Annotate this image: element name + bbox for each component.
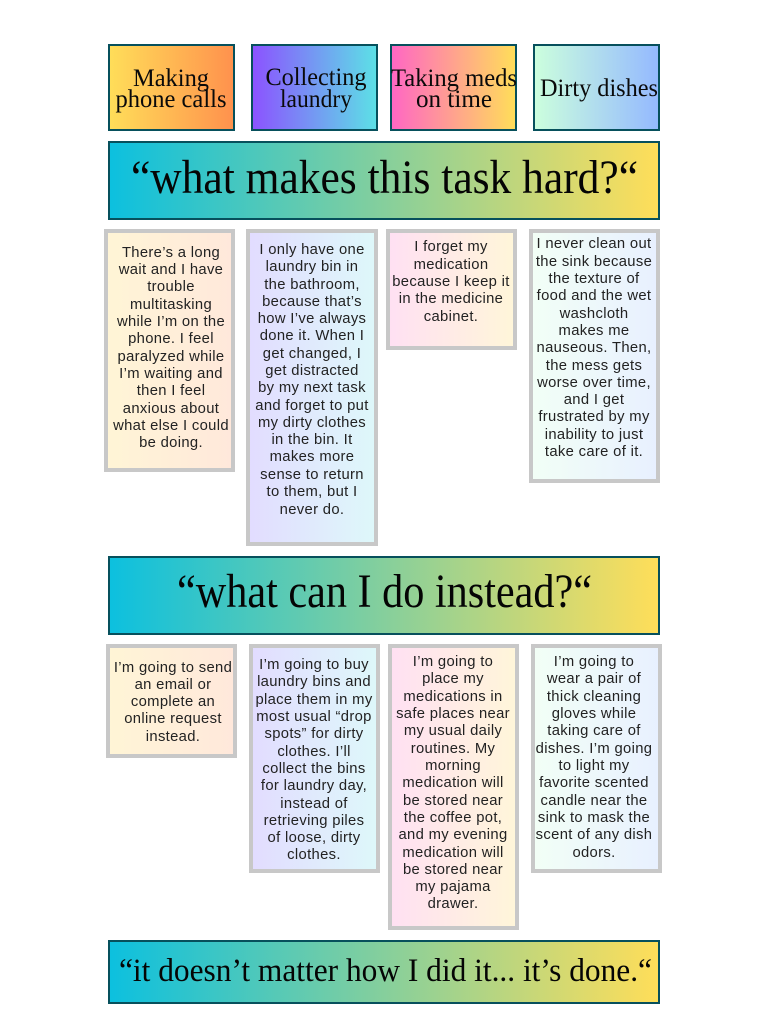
card: dishes difficulty: inability to just: [545, 427, 643, 443]
task label: making phone calls: [109, 45, 234, 130]
heading banner: what makes this task hard: “what makes this task hard?“: [131, 151, 638, 204]
card: laundry alternative: of loose, dirty: [268, 830, 361, 846]
card: laundry alternative: clothes. I’ll: [277, 744, 351, 760]
card: laundry difficulty: makes more: [270, 449, 354, 465]
card: phone calls alternative: complete an: [131, 694, 215, 710]
card: phone calls alternative: online request: [124, 711, 222, 727]
card: dishes alternative: to light my: [558, 758, 630, 774]
card: phone calls difficulty: while I’m on the: [116, 314, 225, 330]
card: laundry difficulty: laundry bin in: [266, 259, 358, 275]
card: phone calls difficulty: anxious about: [123, 401, 219, 417]
card: medication alternative: drawer.: [428, 896, 478, 912]
card: laundry alternative: place them in my: [255, 692, 373, 708]
card: laundry difficulty: get changed, I: [263, 346, 361, 362]
card: laundry alternative: laundry bins and: [257, 674, 371, 690]
card: medication alternative: medication will: [402, 775, 504, 791]
card: dishes alternative: candle near the: [541, 793, 647, 809]
card: medication alternative: be stored near: [403, 793, 503, 809]
card: phone calls difficulty: paralyzed while: [118, 349, 224, 365]
card: laundry alternative: retrieving piles: [264, 813, 364, 829]
card: phone calls difficulty: I’m waiting and: [119, 366, 223, 382]
card: dishes difficulty: I never clean out: [536, 236, 652, 252]
card: medication difficulty: I forget my: [414, 239, 488, 255]
card: laundry difficulty: and forget to put: [255, 398, 369, 414]
card: medication difficulty: medication: [414, 257, 488, 273]
card: laundry difficulty: in the bin. It: [271, 432, 353, 448]
card: medication difficulty: because I keep it: [392, 274, 510, 290]
card: phone calls difficulty: then I feel: [137, 383, 205, 399]
task label: making phone calls: phone calls: [116, 86, 226, 113]
task label: dirty dishes: Dirty dishes: [540, 75, 658, 102]
card: medication difficulty: in the medicine: [399, 291, 503, 307]
card: laundry difficulty: done it. When I: [260, 328, 364, 344]
card: phone calls alternative: instead.: [146, 729, 200, 745]
card: dishes difficulty: worse over time,: [536, 375, 651, 391]
card: dishes difficulty: and I get: [564, 392, 624, 408]
card: laundry difficulty: to them, but I: [267, 484, 357, 500]
card: dishes difficulty: the texture of: [548, 271, 640, 287]
card: laundry difficulty: because that’s: [262, 294, 362, 310]
card: phone calls difficulty: wait and I have: [118, 262, 223, 278]
closing banner: it doesn't matter how I did it: [109, 941, 659, 1003]
card: laundry difficulty: sense to return: [260, 467, 364, 483]
card: laundry alternative: [251, 646, 378, 871]
card: laundry alternative: I’m going to buy: [259, 657, 369, 673]
card: laundry difficulty: never do.: [280, 502, 344, 518]
card: dishes difficulty: the mess gets: [546, 358, 642, 374]
card: dishes alternative: sink to mask the: [538, 810, 650, 826]
card: medication alternative: [390, 646, 517, 928]
card: phone calls difficulty: [106, 231, 233, 470]
heading banner: what can I do instead: “what can I do instead?“: [177, 565, 592, 618]
card: laundry alternative: instead of: [280, 796, 348, 812]
card: dishes alternative: favorite scented: [539, 775, 649, 791]
task label: taking meds on time: [391, 45, 517, 130]
card: medication alternative: safe places near: [396, 706, 510, 722]
card: dishes alternative: wear a pair of: [546, 671, 642, 687]
card: dishes alternative: taking care of: [547, 723, 641, 739]
card: dishes difficulty: frustrated by my: [538, 409, 650, 425]
task label: making phone calls: Making: [133, 65, 209, 92]
card: laundry alternative: spots” for dirty: [264, 726, 364, 742]
task label: collecting laundry: [252, 45, 377, 130]
card: laundry difficulty: how I’ve always: [258, 311, 366, 327]
closing banner: it doesn't matter how I did it: “it doesn’t matter how I did it... it’s done.“: [119, 953, 652, 989]
card: medication alternative: the coffee pot,: [404, 810, 502, 826]
card: dishes alternative: gloves while: [552, 706, 636, 722]
card: dishes difficulty: nauseous. Then,: [537, 340, 651, 356]
card: phone calls difficulty: phone. I feel: [128, 331, 214, 347]
card: medication alternative: my pajama: [415, 879, 491, 895]
task label: collecting laundry: laundry: [280, 86, 352, 113]
card: phone calls difficulty: There’s a long: [122, 245, 220, 261]
card: dishes difficulty: food and the wet: [537, 288, 651, 304]
card: phone calls difficulty: trouble: [147, 279, 195, 295]
card: laundry difficulty: [248, 231, 376, 544]
card: laundry alternative: for laundry day,: [261, 778, 367, 794]
card: laundry difficulty: my dirty clothes: [258, 415, 366, 431]
card: medication alternative: and my evening: [398, 827, 508, 843]
task label: collecting laundry: Collecting: [266, 64, 367, 91]
card: dishes alternative: thick cleaning: [547, 689, 641, 705]
card: dishes alternative: [533, 646, 660, 871]
task label: taking meds on time: on time: [416, 86, 492, 113]
card: medication alternative: morning: [425, 758, 481, 774]
card: dishes difficulty: take care of it.: [545, 444, 643, 460]
card: laundry difficulty: by my next task: [258, 380, 366, 396]
card: phone calls alternative: an email or: [135, 677, 211, 693]
card: dishes alternative: I’m going to: [554, 654, 634, 670]
card: phone calls alternative: I’m going to send: [114, 660, 232, 676]
card: laundry difficulty: I only have one: [259, 242, 365, 258]
card: laundry alternative: clothes.: [287, 847, 341, 863]
card: dishes difficulty: the sink because: [536, 254, 652, 270]
task label: taking meds on time: Taking meds: [391, 65, 517, 92]
card: phone calls alternative: [108, 646, 235, 756]
card: phone calls difficulty: what else I could: [112, 418, 229, 434]
card: medication difficulty: cabinet.: [424, 309, 478, 325]
card: laundry difficulty: get distracted: [265, 363, 359, 379]
card: medication alternative: my usual daily: [404, 723, 502, 739]
card: medication alternative: I’m going to: [413, 654, 493, 670]
card: medication difficulty: [388, 231, 515, 348]
card: medication alternative: medication will: [402, 845, 504, 861]
card: phone calls difficulty: be doing.: [139, 435, 203, 451]
card: medication alternative: place my: [422, 671, 484, 687]
card: laundry difficulty: the bathroom,: [264, 277, 360, 293]
card: medication alternative: routines. My: [411, 741, 496, 757]
card: dishes alternative: scent of any dish: [536, 827, 652, 843]
heading banner: what can I do instead: [109, 557, 659, 634]
card: medication alternative: medications in: [403, 689, 503, 705]
card: medication alternative: be stored near: [403, 862, 503, 878]
heading banner: what makes this task hard: [109, 142, 659, 219]
card: dishes alternative: odors.: [572, 845, 616, 861]
card: dishes difficulty: makes me: [559, 323, 629, 339]
card: dishes difficulty: washcloth: [559, 306, 628, 322]
card: laundry alternative: most usual “drop: [256, 709, 372, 725]
task label: dirty dishes: [534, 45, 659, 130]
card: dishes difficulty: [531, 231, 658, 481]
card: phone calls difficulty: multitasking: [130, 297, 212, 313]
card: dishes alternative: dishes. I’m going: [536, 741, 652, 757]
card: laundry alternative: collect the bins: [262, 761, 366, 777]
